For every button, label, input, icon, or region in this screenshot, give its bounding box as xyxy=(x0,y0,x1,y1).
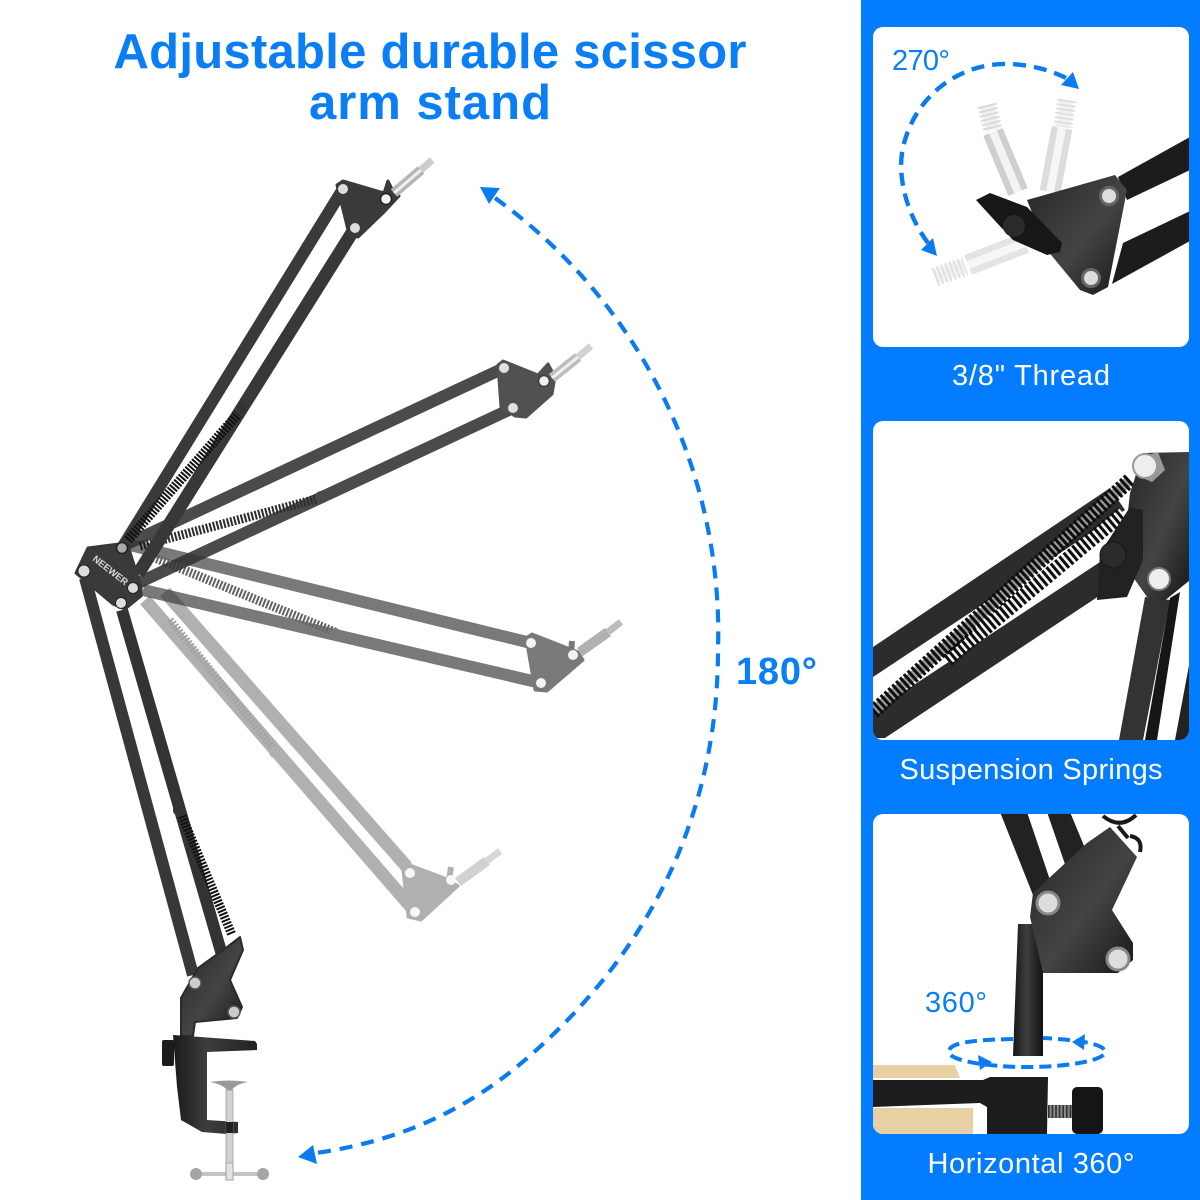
arm position 1 (raised) xyxy=(122,160,432,574)
plate xyxy=(1127,452,1190,602)
arm position 2 xyxy=(125,346,591,582)
arm bars xyxy=(1000,812,1087,895)
caption: suspension springs: Suspension Springs xyxy=(900,754,1162,786)
title: Adjustable durable scissor xyxy=(114,25,746,79)
270 degree label: 270° xyxy=(892,45,950,77)
screws xyxy=(1037,892,1129,970)
arm position 3 xyxy=(130,545,621,691)
base mount plate xyxy=(181,937,243,1036)
hub plate with NEEWER logo: NEEWER xyxy=(90,554,130,588)
title xyxy=(114,25,746,130)
clamp bolt and knob xyxy=(1048,1087,1103,1134)
caption: horizontal 360: Horizontal 360° xyxy=(928,1148,1134,1180)
scissor arm positions xyxy=(76,160,621,1180)
180 degree dashed arc arrow xyxy=(298,187,718,1164)
hub plate with NEEWER logo xyxy=(76,542,141,609)
springs xyxy=(873,480,1130,712)
swivel tube xyxy=(1013,924,1043,1056)
mount plate xyxy=(1030,827,1137,973)
arm bars xyxy=(873,488,1190,740)
360 degree dashed ellipse arrow xyxy=(949,1034,1105,1070)
360 degree label: 360° xyxy=(925,987,987,1019)
panel: suspension springs xyxy=(873,421,1190,740)
clamp top xyxy=(873,1077,1048,1134)
title: arm stand xyxy=(309,76,551,130)
lever xyxy=(976,193,1062,255)
180 degree label: 180° xyxy=(736,651,817,693)
caption: 3/8 thread: 3/8" Thread xyxy=(952,360,1110,392)
270 degree dashed arrow xyxy=(901,64,1079,256)
lever xyxy=(1097,507,1143,600)
arm bars xyxy=(1112,137,1190,284)
silver thread posts xyxy=(935,100,1067,277)
desk clamp xyxy=(162,1035,257,1134)
blue sidebar xyxy=(861,0,1200,1200)
arm position 4 (lowest, most faded) xyxy=(145,592,500,920)
triangular plate xyxy=(1027,175,1127,295)
screws xyxy=(1082,188,1118,286)
small spring hook xyxy=(1103,815,1141,852)
lower arm xyxy=(85,578,232,975)
panel: 3/8 thread xyxy=(873,27,1190,347)
panel: horizontal 360 xyxy=(873,812,1189,1134)
wood table xyxy=(873,1065,973,1134)
clamp screw and T-handle xyxy=(190,1080,269,1180)
nuts xyxy=(1133,452,1170,590)
